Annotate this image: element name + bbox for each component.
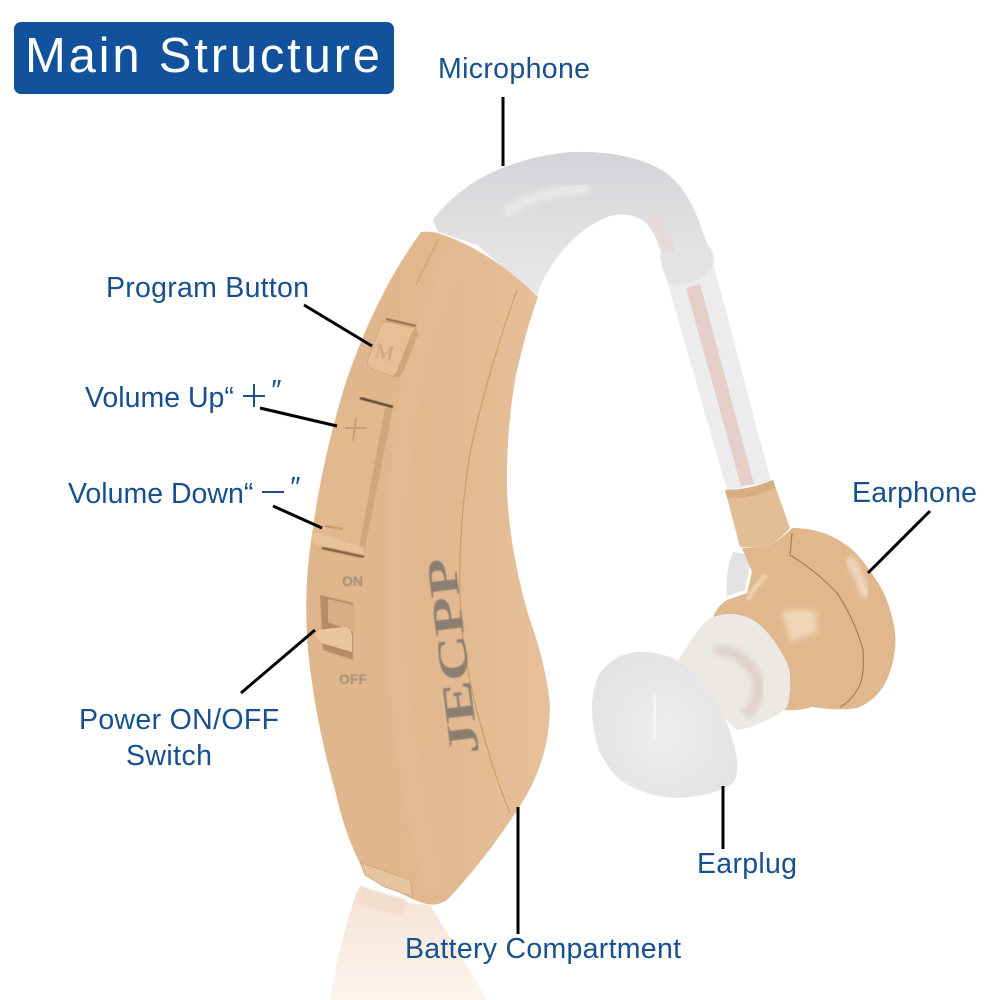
main body [306, 232, 550, 905]
callout: Volume Down: ″ [289, 472, 300, 504]
callout: Earphone: Earphone [852, 477, 977, 509]
earplug [592, 614, 790, 798]
callout: Earplug: Earplug [697, 848, 797, 880]
program button M [368, 319, 418, 377]
callout: Volume Up [85, 375, 337, 426]
callout: Earplug [697, 786, 797, 880]
callout: Volume Down: Volume Down“ [68, 478, 253, 510]
earphone receiver [713, 480, 895, 710]
clear tube [668, 262, 771, 490]
callout: Power ON/OFF Switch [79, 630, 315, 772]
program button M: M [373, 338, 397, 366]
callout: Power ON/OFF Switch: Switch [126, 740, 212, 772]
callout: Program Button [106, 272, 372, 346]
callout: Volume Down [68, 472, 322, 528]
label: OFF: OFF [339, 671, 367, 687]
label: ON: ON [342, 573, 363, 589]
ear hook [433, 152, 714, 296]
power switch [315, 573, 363, 660]
volume rocker button [312, 398, 393, 557]
brand JECPP: JECPP [419, 555, 489, 757]
callout: Power ON/OFF Switch: Power ON/OFF [79, 704, 279, 736]
callout: Volume Up: Volume Up“ [85, 382, 234, 414]
callout: Earphone [852, 477, 977, 573]
callout: Program Button: Program Button [106, 272, 309, 304]
callout: Battery Compartment: Battery Compartment [405, 933, 681, 965]
callout: Microphone: Microphone [438, 53, 590, 85]
title badge: Main Structure [25, 29, 380, 83]
reflection under device [330, 886, 487, 1000]
callout: Volume Up: ″ [270, 375, 281, 407]
